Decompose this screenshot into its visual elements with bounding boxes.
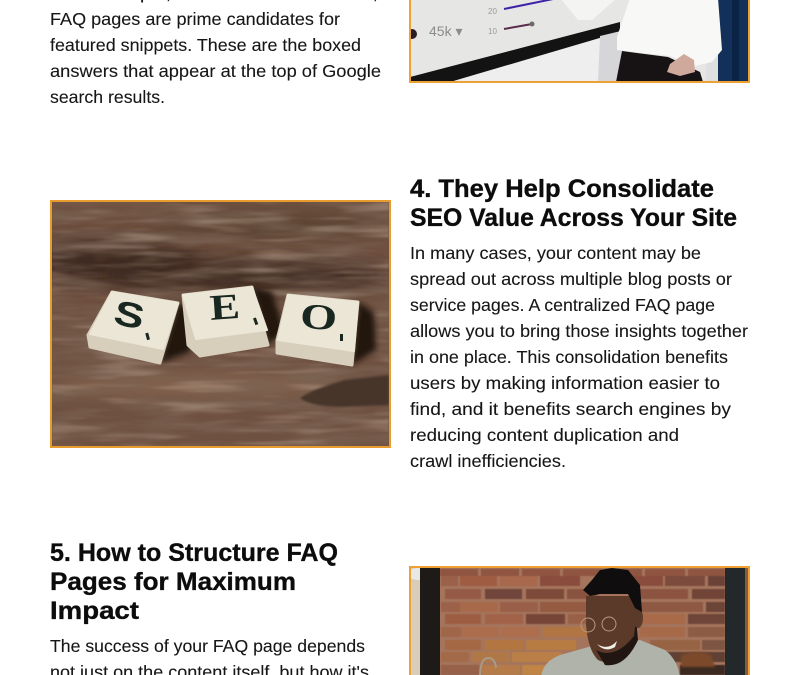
photo: woman presenting chart on a screen <box>407 0 749 83</box>
text block: section 4 paragraph: reducing content duplication and <box>410 425 679 445</box>
text block: featured snippets paragraph: search results. <box>50 87 165 107</box>
text block: featured snippets paragraph: answers that appear at the top of Google <box>50 61 381 81</box>
text block: section 4 paragraph: in one place. This consolidation benefits <box>410 347 728 367</box>
text block: featured snippets paragraph <box>50 0 381 107</box>
heading: section 5 <box>50 539 338 625</box>
text block: section 5 paragraph <box>50 636 369 675</box>
text block: section 4 paragraph: In many cases, your content may be <box>410 243 701 263</box>
text block: section 4 paragraph: crawl inefficiencies. <box>410 451 566 471</box>
photo: woman presenting chart on a screen: 45k ▾ <box>429 23 462 39</box>
text block: section 4 paragraph: allows you to bring those insights together <box>410 321 748 341</box>
text block: section 4 paragraph <box>410 243 748 471</box>
text block: featured snippets paragraph: FAQ pages are prime candidates for <box>50 9 340 29</box>
icon: E tile <box>183 286 268 356</box>
photo: SEO letter tiles on wood <box>20 201 390 447</box>
shirt <box>541 640 680 675</box>
photo: woman presenting chart on a screen: 10 <box>488 27 497 36</box>
text block: section 5 paragraph: The success of your FAQ page depends <box>50 636 365 656</box>
heading: section 4: SEO Value Across Your Site <box>410 204 737 232</box>
text block: section 4 paragraph: spread out across multiple blog posts or <box>410 269 732 289</box>
text block: section 4 paragraph: service pages. A centralized FAQ page <box>410 295 715 315</box>
photo: woman presenting chart on a screen: 20 <box>488 7 497 16</box>
icon: S tile <box>88 292 178 363</box>
photo: smiling man at brick wall <box>408 567 749 675</box>
icon: E tile: E <box>208 286 241 328</box>
text block: section 4 paragraph: users by making information easier to <box>410 373 720 393</box>
icon: O tile: O <box>299 295 339 339</box>
heading: section 5: Pages for Maximum <box>50 568 296 596</box>
heading: section 5: Impact <box>50 597 140 625</box>
text block: section 4 paragraph: find, and it benefits search engines by <box>410 399 731 419</box>
head <box>586 596 638 662</box>
heading: section 4 <box>410 175 737 232</box>
heading: section 4: 4. They Help Consolidate <box>410 175 714 203</box>
text block: featured snippets paragraph: featured snippets. These are the boxed <box>50 35 361 55</box>
heading: section 5: 5. How to Structure FAQ <box>50 539 338 567</box>
icon: O tile <box>277 295 358 365</box>
icon: S tile: S <box>110 293 148 337</box>
